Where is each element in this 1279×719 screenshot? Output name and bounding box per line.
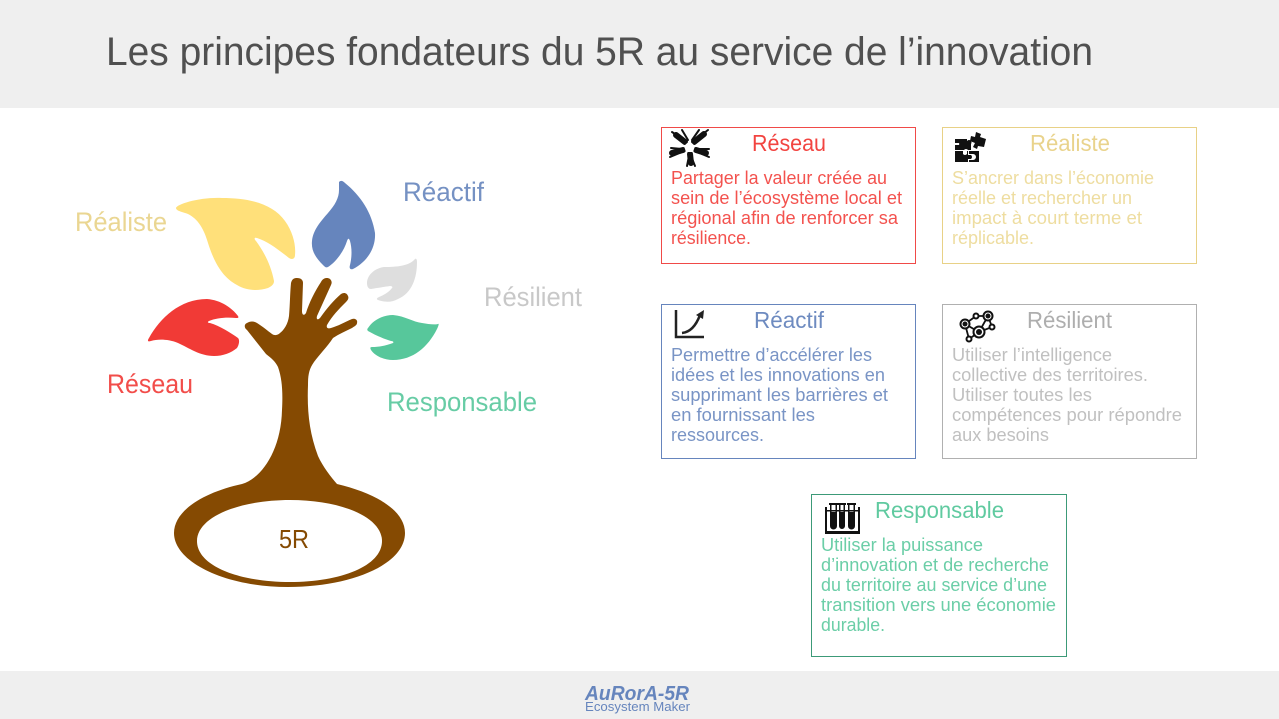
panel: Réactif: [662, 304, 916, 458]
leaf: Résilient: [367, 259, 417, 302]
body text: [952, 345, 1182, 445]
icon: test tubes: [825, 503, 860, 534]
label: Réseau: Réseau: [107, 369, 193, 399]
body text: [671, 345, 888, 445]
body text: Utiliser toutes les: [952, 385, 1092, 405]
leaf: Réactif: [312, 181, 375, 269]
heading: Résilient: [1027, 307, 1113, 333]
body text: sein de l’écosystème local et: [671, 188, 902, 208]
body text: ressources.: [671, 425, 764, 445]
leaf: Réaliste: [176, 198, 295, 290]
body text: [952, 168, 1154, 248]
body text: impact à court terme et: [952, 208, 1142, 228]
leaf: Responsable: [367, 315, 439, 360]
tree illustration: [148, 181, 439, 587]
leaf: Réseau: [148, 299, 239, 356]
body text: régional afin de renforcer sa: [671, 208, 899, 228]
body text: S’ancrer dans l’économie: [952, 168, 1154, 188]
panel: Résilient: [942, 304, 1196, 458]
body text: résilience.: [671, 228, 751, 248]
heading: Réaliste: [1030, 130, 1110, 156]
label: Réactif: Réactif: [403, 177, 484, 207]
body text: Permettre d’accélérer les: [671, 345, 872, 365]
title: Les principes fondateurs du 5R au service de l’innovation: [106, 30, 1093, 74]
panel: Réseau: [662, 128, 916, 264]
label: Résilient: Résilient: [484, 282, 582, 312]
footer logo: Ecosystem Maker: [585, 699, 691, 714]
body text: aux besoins: [952, 425, 1049, 445]
body text: [671, 168, 902, 248]
body text: durable.: [821, 615, 885, 635]
footer logo: AuRorA-5R: [584, 683, 690, 705]
heading: Responsable: [875, 497, 1004, 523]
footer logo: [584, 683, 691, 714]
footer band: [0, 671, 1279, 719]
body text: transition vers une économie: [821, 595, 1056, 615]
icon: growth curve: [676, 310, 704, 337]
body text: d’innovation et de recherche: [821, 555, 1049, 575]
body text: en fournissant les: [671, 405, 815, 425]
body text: du territoire au service d’une: [821, 575, 1047, 595]
hand and trunk: [174, 278, 405, 587]
body text: Partager la valeur créée au: [671, 168, 887, 188]
heading: Réseau: [752, 130, 826, 156]
icon: puzzle: [955, 132, 986, 162]
label: Responsable: Responsable: [387, 387, 537, 417]
body text: supprimant les barrières et: [671, 385, 888, 405]
body text: réelle et rechercher un: [952, 188, 1132, 208]
icon: joined hands star: [670, 130, 709, 166]
label: Réaliste: Réaliste: [75, 207, 167, 237]
body text: [821, 535, 1056, 635]
panel: Réaliste: [942, 128, 1196, 264]
label: 5R: 5R: [279, 524, 309, 554]
body text: compétences pour répondre: [952, 405, 1182, 425]
panel: Responsable: [812, 494, 1066, 656]
body text: collective des territoires.: [952, 365, 1148, 385]
body text: Utiliser l’intelligence: [952, 345, 1112, 365]
icon: people network: [960, 312, 994, 342]
body text: Utiliser la puissance: [821, 535, 983, 555]
body text: idées et les innovations en: [671, 365, 885, 385]
heading: Réactif: [754, 307, 825, 333]
body text: réplicable.: [952, 228, 1034, 248]
title band: [0, 0, 1279, 108]
